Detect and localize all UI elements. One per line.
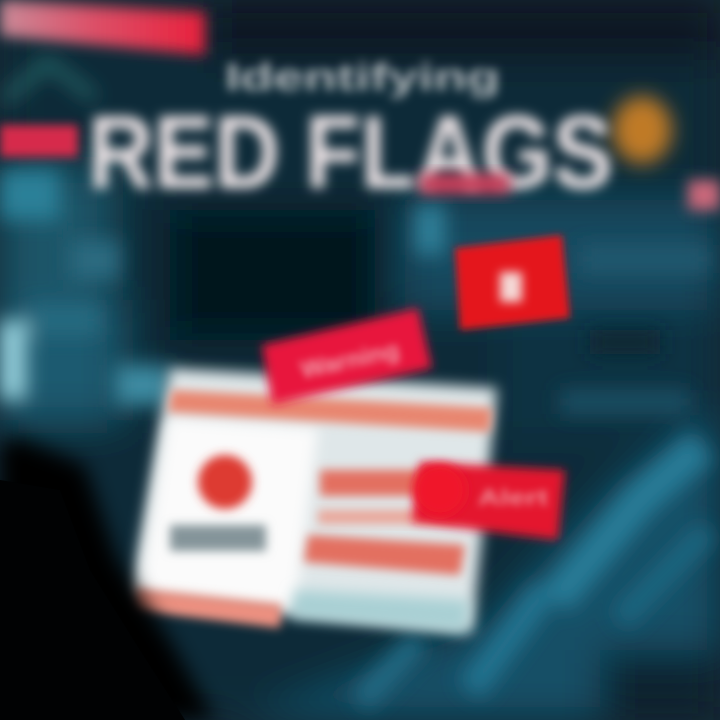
icon: white mark: [500, 272, 522, 302]
footer band: [132, 588, 282, 628]
caption: grey label: [170, 525, 266, 551]
row: red text line 1: [320, 470, 430, 496]
row: red text line 2: [318, 510, 458, 524]
silhouette: dark figure lower-left: [0, 438, 215, 720]
decorative banner: left red bar: [0, 125, 78, 157]
card header band: [168, 390, 492, 432]
decorative: red underline under title: [420, 174, 510, 194]
callout: red alert label on card right: [412, 462, 565, 540]
title: red flags: RED FLAGS: [88, 95, 613, 211]
decorative: far-right red tag: [688, 180, 720, 210]
card left white column: [140, 418, 318, 608]
row: red text line 3: [304, 535, 465, 575]
icon: glowing orange coin: [612, 96, 672, 164]
callout text: warning: Warning: [298, 337, 402, 384]
icon: red circle: [198, 455, 252, 509]
icon: red warning flag card: [455, 235, 570, 330]
decorative banner: top-left red ribbon: [0, 0, 205, 55]
icon: bright red dot: [414, 464, 466, 516]
heading small: identifying: Identifying: [225, 57, 500, 99]
callout text: alert: Alert: [478, 485, 549, 510]
footer teal tint: [290, 590, 470, 632]
panel: document card: [130, 368, 497, 632]
callout: red warning label on card top: [262, 308, 432, 405]
